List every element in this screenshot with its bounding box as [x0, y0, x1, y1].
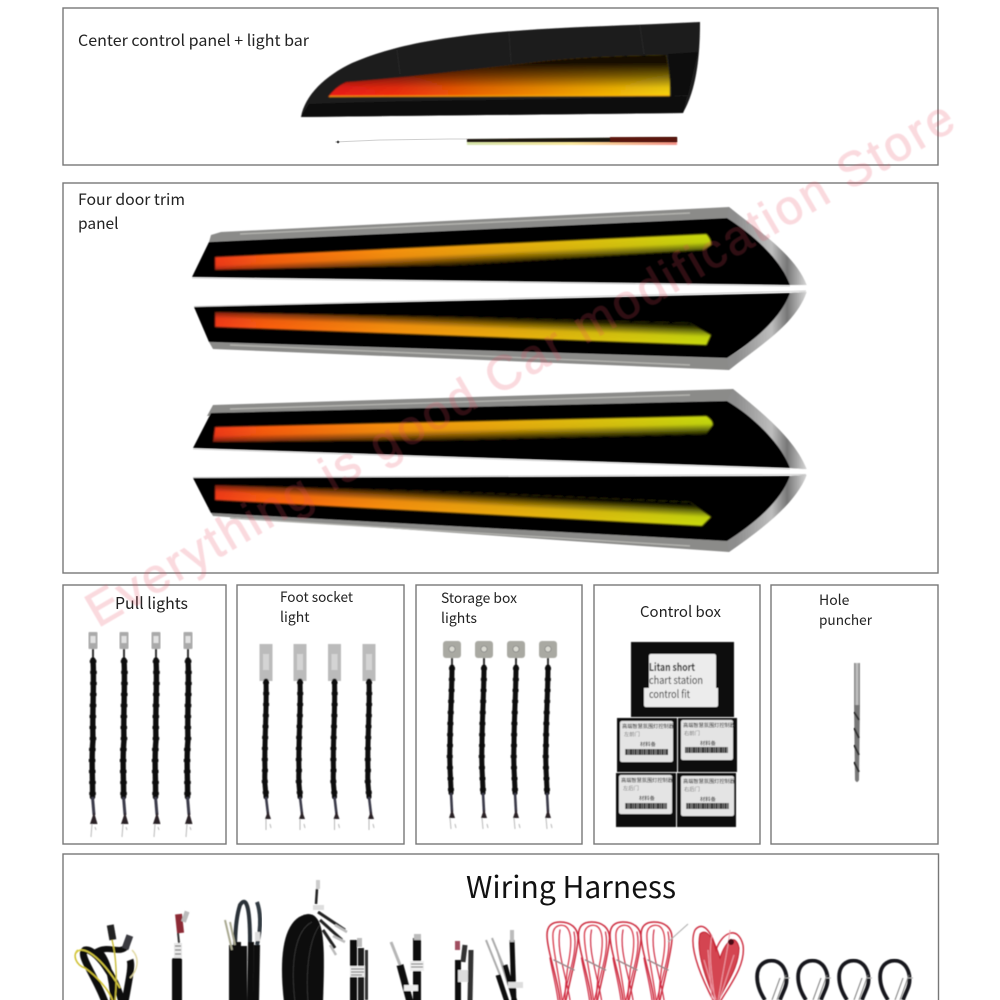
door panel 4 — [193, 474, 806, 552]
panel: foot socket light — [237, 585, 404, 844]
panel: center control panel + light bar — [63, 8, 938, 165]
light bar strip — [335, 137, 677, 145]
harness: yellow and black — [75, 924, 137, 1000]
door panel 3 — [193, 389, 806, 469]
panel: control box — [594, 585, 760, 844]
door 2 glow — [215, 312, 711, 345]
label: four door trim panel: panel — [78, 212, 119, 234]
harness: single black lead with red connector — [172, 911, 190, 1000]
main control box: Litan short — [649, 659, 695, 675]
harness: small connector group A — [350, 938, 368, 1000]
main control box — [631, 642, 734, 717]
label: storage box lights: lights — [441, 608, 477, 628]
glowing center light — [328, 55, 670, 97]
panel: storage box lights — [416, 585, 582, 844]
four door control modules: 高端智慧氛围灯控制器 — [683, 721, 736, 729]
harness: looped black lead — [225, 902, 260, 1000]
heading: wiring harness: Wiring Harness — [466, 863, 676, 907]
label: center control panel: Center control panel + light bar — [78, 29, 310, 51]
four door control modules: 高端智慧氛围灯控制器 — [622, 722, 675, 730]
door 4 glow — [215, 485, 711, 526]
four door control modules: 高端智慧氛围灯控制器 — [683, 777, 736, 785]
harness: red wire bundle — [693, 926, 743, 1000]
door panel 2 — [194, 291, 806, 370]
label: pull lights: Pull lights — [115, 590, 188, 614]
four door control modules: 右后门 — [684, 785, 700, 793]
storage light cables — [443, 641, 557, 829]
harness: four black wire loops — [757, 961, 913, 1000]
four door control modules: 材料备 — [640, 740, 657, 748]
icon: drill bit — [854, 663, 860, 782]
main control box: chart station — [649, 672, 703, 688]
center console trim piece — [301, 22, 700, 117]
foot light cables — [260, 644, 376, 830]
main control box: control fit — [649, 686, 690, 702]
harness: four red wire loops — [547, 922, 688, 1000]
four door control modules: 材料备 — [700, 739, 717, 747]
label: hole puncher: puncher — [819, 610, 873, 630]
label: four door trim panel: Four door trim — [78, 188, 185, 210]
four door control modules: 材料备 — [700, 795, 717, 803]
four door control modules: 左后门 — [623, 784, 639, 792]
four door control modules: 右前门 — [684, 729, 700, 737]
label: hole puncher: Hole — [819, 590, 850, 610]
pull light cables — [88, 632, 192, 837]
door 1 glow — [215, 234, 711, 270]
door 3 glow — [213, 416, 713, 442]
harness: small connector group C — [455, 930, 523, 1000]
four door control modules: 左前门 — [624, 730, 640, 738]
label: storage box lights: Storage box — [441, 588, 517, 608]
harness: large coiled black bundle — [282, 880, 347, 1000]
panel: four door trim panel — [63, 183, 938, 573]
label: foot socket light: light — [280, 607, 310, 627]
harness: small connector group B — [391, 934, 424, 1000]
panel: wiring harness — [63, 854, 938, 1000]
panel: hole puncher — [771, 585, 938, 844]
label: foot socket light: Foot socket — [280, 587, 354, 607]
panel: pull lights — [63, 585, 226, 844]
watermark: Everything is good Car modification Store — [77, 91, 963, 638]
four door control modules — [616, 718, 737, 827]
four door control modules: 高端智慧氛围灯控制器 — [621, 776, 674, 784]
four door control modules: 材料备 — [639, 794, 656, 802]
label: control box: Control box — [640, 601, 722, 622]
door panel 1 — [192, 207, 806, 286]
